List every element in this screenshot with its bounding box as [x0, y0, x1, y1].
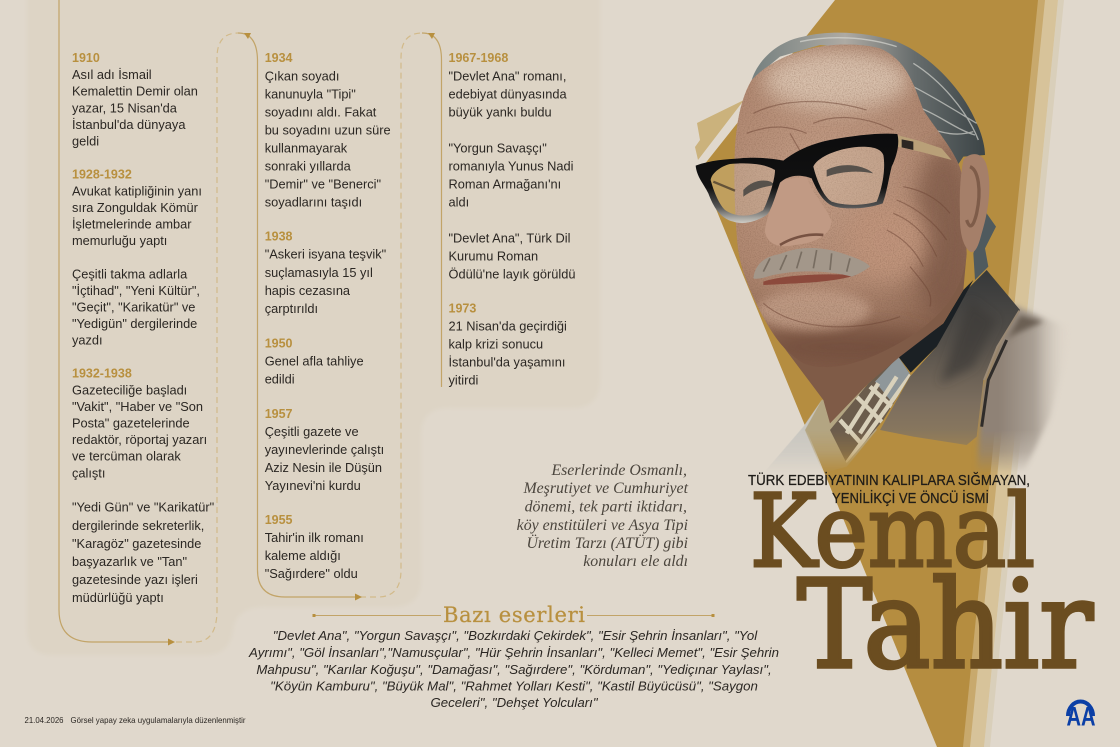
- timeline entry: 1973: kalp krizi sonucu: [448, 337, 543, 352]
- mustache: [753, 248, 870, 279]
- timeline entry: 1932-1938: Gazeteciliğe başladı: [72, 382, 187, 397]
- timeline entry: 1934: soyadlarını taşıdı: [265, 194, 362, 209]
- subtitle: TÜRK EDEBİYATININ KALIPLARA SIĞMAYAN,: [748, 471, 1030, 489]
- heading: some works: [312, 603, 714, 627]
- timeline entry: 1934: soyadını aldı. Fakat: [265, 104, 377, 119]
- timeline entry: 1928-1932: yazdı: [72, 332, 103, 347]
- timeline entry: 1910: Asıl adı İsmail: [72, 67, 152, 82]
- neck: [783, 253, 967, 423]
- timeline entry: 1932-1938: gazetesinde yazı işleri: [72, 572, 198, 587]
- italic summary text: konuları ele aldı: [583, 553, 688, 570]
- italic summary text: Eserlerinde Osmanlı,: [550, 462, 687, 479]
- timeline entry: 1928-1932: Çeşitli takma adlarla: [72, 266, 188, 281]
- ear: [960, 154, 989, 252]
- timeline entry: 1973: [448, 302, 567, 388]
- timeline entry: 1973: 21 Nisan'da geçirdiği: [448, 319, 567, 334]
- timeline entry: 1938: çarptırıldı: [265, 301, 318, 316]
- footer: date and note: Görsel yapay zeka uygulamalarıyla düzenlenmiştir: [70, 715, 246, 725]
- timeline entry: 1928-1932: İşletmelerinde ambar: [72, 216, 192, 232]
- timeline entry: 1950: edildi: [265, 371, 295, 386]
- arrow: top of column two: [244, 33, 251, 39]
- timeline entry: 1932-1938: ve tercüman olarak: [72, 449, 181, 464]
- lens reflections: [713, 182, 735, 191]
- timeline entry: 1932-1938: redaktör, röportaj yazarı: [72, 432, 207, 447]
- timeline entry: 1973: yitirdi: [448, 373, 478, 388]
- timeline entry: 1928-1932: "Yedigün" dergilerinde: [72, 316, 197, 331]
- arrow: top of column three: [428, 33, 435, 39]
- timeline entry: 1967-1968: Roman Armağanı'nı: [448, 177, 561, 192]
- timeline entry: 1928-1932: memurluğu yaptı: [72, 233, 167, 248]
- timeline entry: 1910: 1910: [72, 51, 100, 65]
- timeline entry: 1950: [265, 336, 364, 386]
- timeline entry: 1910: [72, 51, 198, 149]
- timeline entry: 1934: sonraki yıllarda: [265, 158, 352, 173]
- arrow: column one to two: [168, 638, 175, 646]
- italic summary text: dönemi, tek parti iktidarı,: [525, 498, 687, 516]
- timeline entry: 1957: [265, 407, 384, 493]
- plaid shirt collar: [830, 358, 910, 463]
- timeline entry: 1932-1938: "Yedi Gün" ve "Karikatür": [72, 500, 214, 515]
- timeline entry: 1932-1938: "Vakit", "Haber ve "Son: [72, 399, 203, 414]
- face shading: [730, 40, 973, 373]
- timeline entry: 1957: 1957: [265, 407, 293, 421]
- timeline entry: 1928-1932: 1928-1932: [72, 168, 132, 182]
- timeline connector lines: [59, 0, 442, 642]
- timeline entry: 1967-1968: "Yorgun Savaşçı": [448, 141, 547, 156]
- list of works: "Devlet Ana", "Yorgun Savaşçı", "Bozkırdaki Çekirdek", "Esir Şehrin İnsanları", "Yol: [273, 628, 758, 643]
- timeline entry: 1928-1932: sıra Zonguldak Kömür: [72, 200, 199, 215]
- italic summary text: Üretim Tarzı (ATÜT) gibi: [526, 534, 688, 552]
- timeline entry: 1955: Tahir'in ilk romanı: [265, 530, 364, 545]
- list of works: Mahpusu", "Karılar Koğuşu", "Damağası", "Sağırdere", "Körduman", "Yediçınar Yaylası",: [256, 662, 772, 677]
- timeline entry: 1928-1932: "Geçit", "Karikatür" ve: [72, 300, 195, 314]
- italic summary text: köy enstitüleri ve Asya Tipi: [517, 517, 688, 534]
- timeline entry: 1932-1938: başyazarlık ve "Tan": [72, 554, 187, 569]
- timeline entry: 1932-1938: 1932-1938: [72, 367, 132, 381]
- timeline entry: 1938: "Askeri isyana teşvik": [265, 247, 386, 262]
- timeline entry: 1950: Genel afla tahliye: [265, 353, 364, 368]
- timeline entry: 1910: yazar, 15 Nisan'da: [72, 100, 178, 115]
- timeline entry: 1957: Çeşitli gazete ve: [265, 424, 359, 439]
- glasses frame: [696, 134, 898, 223]
- timeline entry: 1938: suçlamasıyla 15 yıl: [265, 265, 373, 280]
- face: [734, 45, 967, 367]
- timeline entry: 1955: "Sağırdere" oldu: [265, 566, 358, 581]
- italic summary text: Meşrutiyet ve Cumhuriyet: [522, 480, 689, 497]
- timeline entry: 1932-1938: çalıştı: [72, 465, 105, 480]
- lens tint: [711, 147, 884, 216]
- timeline entry: 1957: Yayınevi'ni kurdu: [265, 478, 361, 493]
- timeline entry: 1973: 1973: [448, 302, 476, 316]
- timeline entry: 1967-1968: aldı: [448, 195, 469, 210]
- arrow: column two to three: [355, 594, 362, 600]
- timeline entry: 1932-1938: müdürlüğü yaptı: [72, 590, 164, 605]
- list of works: "Köyün Kamburu", "Büyük Mal", "Rahmet Yolları Kesti", "Kastil Büyücüsü", "Saygon: [270, 678, 758, 694]
- timeline entry: 1934: "Demir" ve "Benerci": [265, 176, 381, 191]
- heading: some works: Bazı eserleri: [443, 603, 585, 627]
- timeline entry: 1973: İstanbul'da yaşamını: [448, 355, 565, 370]
- timeline entry: 1928-1932: "İçtihad", "Yeni Kültür",: [72, 283, 200, 298]
- timeline entry: 1938: hapis cezasına: [265, 283, 351, 298]
- list of works: Ayrımı", "Göl İnsanları","Namusçular", "Hür Şehrin İnsanları", "Kelleci Memet", "Esir Şehrin: [248, 645, 779, 660]
- glasses temple arm: [897, 135, 952, 160]
- timeline entry: 1934: kullanmayarak: [265, 140, 348, 155]
- subtitle: [748, 471, 1030, 507]
- nape hair: [973, 213, 996, 280]
- timeline entry: 1932-1938: [72, 367, 214, 605]
- icon: AA logo: AA: [1066, 702, 1096, 732]
- timeline entry: 1932-1938: Posta" gazetelerinde: [72, 416, 190, 431]
- timeline entry: 1934: kanunuyla "Tipi": [265, 86, 356, 101]
- timeline entry: 1910: geldi: [72, 134, 99, 149]
- timeline entry: 1928-1932: Avukat katipliğinin yanı: [72, 183, 202, 198]
- timeline entry: 1950: 1950: [265, 336, 293, 350]
- timeline entry: 1967-1968: "Devlet Ana" romanı,: [448, 68, 566, 83]
- timeline entry: 1955: kaleme aldığı: [265, 548, 341, 563]
- timeline entry: 1934: bu soyadını uzun süre: [265, 122, 391, 137]
- timeline entry: 1932-1938: dergilerinde sekreterlik,: [72, 518, 204, 533]
- timeline entry: 1910: İstanbul'da dünyaya: [72, 117, 186, 132]
- timeline entry: 1934: 1934: [265, 51, 293, 65]
- dark shirt collar band: [898, 280, 973, 373]
- timeline entry: 1938: 1938: [265, 230, 293, 244]
- timeline entry: 1957: yayınevlerinde çalıştı: [265, 442, 384, 457]
- timeline entry: 1967-1968: Ödülü'ne layık görüldü: [448, 267, 575, 282]
- timeline entry: 1967-1968: romanıyla Yunus Nadi: [448, 159, 573, 174]
- timeline entry: 1957: Aziz Nesin ile Düşün: [265, 460, 382, 475]
- list of works: Geceleri", "Dehşet Yolcuları": [430, 695, 599, 710]
- timeline entry: 1934: Çıkan soyadı: [265, 68, 339, 83]
- timeline entry: 1967-1968: 1967-1968: [448, 51, 508, 65]
- title: Kemal: Kemal: [750, 473, 1035, 590]
- mouth: [763, 274, 857, 285]
- timeline entry: 1955: 1955: [265, 513, 293, 527]
- timeline entry: 1967-1968: "Devlet Ana", Türk Dil: [448, 231, 570, 246]
- hair: [752, 33, 985, 197]
- timeline entry: 1932-1938: "Karagöz" gazetesinde: [72, 536, 201, 551]
- timeline entry: 1967-1968: [448, 51, 575, 282]
- timeline entry: 1934: [265, 51, 391, 209]
- gold triangular backdrop: [695, 0, 1064, 747]
- jacket and shirt: [763, 270, 1070, 473]
- timeline background panel: [27, 0, 600, 655]
- subtitle: YENİLİKÇİ VE ÖNCÜ İSMİ: [832, 489, 989, 507]
- timeline entry: 1967-1968: büyük yankı buldu: [448, 104, 552, 119]
- portrait of Kemal Tahir: [696, 33, 1070, 473]
- eyes: [743, 165, 873, 197]
- title: Tahir: Tahir: [797, 554, 1094, 696]
- hair strands: [800, 38, 978, 190]
- timeline entry: 1910: Kemalettin Demir olan: [72, 84, 198, 99]
- timeline entry: 1967-1968: Kurumu Roman: [448, 249, 538, 264]
- timeline entry: 1938: [265, 230, 386, 316]
- timeline entry: 1967-1968: edebiyat dünyasında: [448, 86, 567, 101]
- nose: [765, 177, 832, 246]
- timeline entry: 1955: [265, 513, 364, 581]
- footer: date and note: 21.04.2026: [24, 715, 64, 725]
- timeline entry: 1928-1932: [72, 168, 202, 347]
